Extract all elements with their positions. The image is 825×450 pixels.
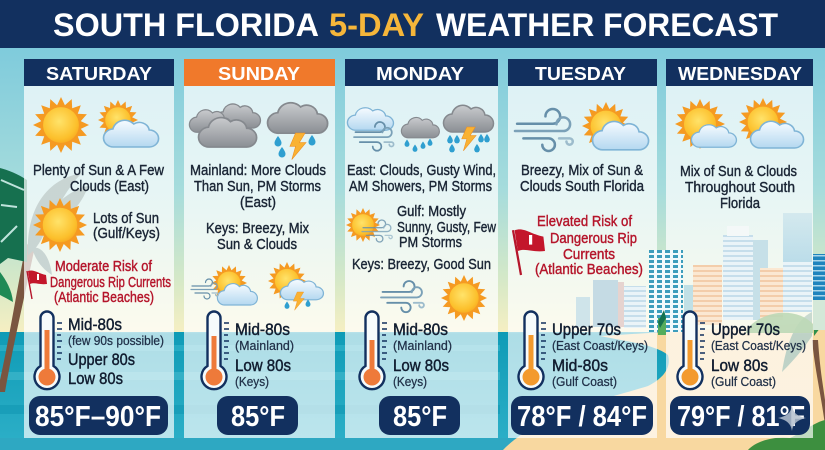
Tuesday temperature notes: (East Coast/Keys) (552, 338, 648, 353)
Saturday east forecast (33, 162, 164, 195)
Monday gulf forecast (397, 203, 496, 251)
Monday keys forecast: Keys: Breezy, Good Sun (352, 256, 491, 273)
icon: thermometer (360, 312, 387, 389)
Wednesday forecast (680, 163, 797, 212)
Wednesday temperature pill: 79°F / 81°F (677, 401, 805, 433)
icon: storm cloud with rain (443, 105, 494, 152)
Monday temperature notes: (Mainland) (393, 338, 452, 353)
Tuesday rip current warning (535, 214, 643, 278)
Monday header: MONDAY (376, 63, 465, 84)
Tuesday rip current warning: Dangerous Rip (550, 231, 637, 247)
Saturday header: SATURDAY (46, 63, 153, 84)
icon: sun, cloud and storm (268, 262, 323, 310)
panel: Wednesday (666, 59, 813, 438)
Tuesday forecast: Breezy, Mix of Sun & (521, 162, 643, 179)
Sunday temperature pill (217, 396, 298, 435)
Monday gulf forecast: Gulf: Mostly (397, 203, 466, 220)
Wednesday panel backing (666, 59, 813, 438)
Saturday temperature pill: 85°F–90°F (35, 401, 161, 433)
icon: thermometer (678, 312, 705, 389)
Monday temperature pill (379, 396, 460, 435)
panel: Monday (345, 59, 498, 438)
icon: sun (441, 275, 487, 321)
Saturday gulf forecast: Lots of Sun (93, 210, 159, 227)
icon: wind, sun and cloud (191, 265, 257, 305)
Monday gulf forecast: PM Storms (399, 234, 462, 251)
panel: Sunday (184, 59, 335, 438)
icon: sun behind cloud (739, 98, 804, 148)
Sunday temperature notes: Low 80s (235, 357, 291, 375)
icon: cloud with wind (347, 108, 394, 151)
Tuesday header (508, 59, 657, 86)
Sunday mainland forecast: (East) (240, 194, 276, 211)
Sunday keys forecast: Sun & Clouds (217, 236, 297, 253)
icon: rip current flag (27, 270, 47, 299)
Tuesday panel backing (508, 59, 657, 438)
Wednesday temperature notes (711, 321, 806, 389)
Saturday temperature notes: Upper 80s (68, 351, 135, 369)
Monday temperature notes (393, 321, 452, 389)
Wednesday header (666, 59, 813, 86)
icon: sparkle watermark (778, 405, 806, 431)
Sunday keys forecast: Keys: Breezy, Mix (206, 220, 309, 237)
Monday header (345, 59, 498, 86)
Saturday temperature notes (68, 316, 164, 388)
Saturday temperature notes: (few 90s possible) (68, 333, 164, 348)
icon: sun gulf (33, 198, 87, 252)
icon: sun behind cloud (582, 102, 649, 150)
background: sky (0, 48, 825, 333)
Tuesday rip current warning: Elevated Risk of (537, 214, 633, 230)
Sunday mainland forecast: Mainland: More Clouds (190, 162, 326, 179)
Tuesday temperature notes: Mid-80s (552, 357, 608, 375)
Saturday header (24, 59, 174, 86)
Saturday east forecast: Plenty of Sun & A Few (33, 162, 164, 179)
Tuesday temperature notes: (Gulf Coast) (552, 374, 617, 389)
Wednesday forecast: Mix of Sun & Clouds (680, 163, 797, 180)
Wednesday temperature notes: (Gulf Coast) (711, 374, 776, 389)
icon: sun with wind (346, 208, 392, 242)
Monday temperature notes: Mid-80s (393, 321, 448, 339)
Sunday header: SUNDAY (218, 63, 301, 84)
icon: thermometer (202, 312, 229, 389)
Tuesday temperature notes (552, 321, 648, 389)
icon: storm cloud (268, 103, 328, 160)
title banner (0, 0, 825, 48)
Tuesday header: TUESDAY (535, 63, 627, 84)
Wednesday forecast: Throughout South (685, 179, 795, 196)
Sunday mainland forecast (190, 162, 326, 211)
title: 5-Day: 5-DAY (329, 7, 424, 43)
icon: heavy clouds (189, 104, 260, 147)
icon: rip current flag (513, 229, 545, 275)
Sunday keys forecast (206, 220, 309, 253)
Sunday temperature notes: (Keys) (235, 374, 269, 389)
Wednesday temperature notes: (East Coast/Keys) (711, 338, 806, 353)
Sunday temperature notes (235, 321, 294, 389)
background: sea (0, 332, 825, 450)
Tuesday forecast (520, 162, 645, 195)
Monday east forecast: East: Clouds, Gusty Wind, (347, 162, 496, 179)
icon: thermometer (34, 312, 62, 389)
Saturday rip current warning: Moderate Risk of (55, 259, 153, 275)
Monday east forecast: AM Showers, PM Storms (349, 178, 492, 195)
icon: sun behind cloud (98, 100, 159, 147)
Saturday temperature notes: Low 80s (68, 370, 123, 388)
Tuesday rip current warning: (Atlantic Beaches) (535, 262, 643, 278)
panel: Tuesday (508, 59, 657, 438)
background: city skyline (576, 213, 825, 335)
Saturday east forecast: Clouds (East) (70, 178, 149, 195)
Tuesday rip current warning: Currents (563, 247, 615, 263)
Tuesday forecast: Clouds South Florida (520, 178, 645, 195)
Tuesday temperature notes: Upper 70s (552, 321, 621, 339)
Saturday gulf forecast: (Gulf/Keys) (93, 225, 160, 242)
icon: sun behind cloud (675, 99, 736, 149)
icon: wind (381, 281, 424, 312)
Sunday temperature notes: (Mainland) (235, 338, 294, 353)
icon: shower cloud (401, 117, 439, 152)
Sunday header (184, 59, 335, 86)
Tuesday temperature pill: 78°F / 84°F (517, 401, 647, 433)
background: left palm tree (0, 168, 88, 392)
Monday east forecast (347, 162, 496, 195)
Wednesday header: WEDNESDAY (678, 63, 803, 84)
panel: Saturday (24, 59, 174, 438)
Wednesday temperature notes: Upper 70s (711, 321, 780, 339)
Saturday rip current warning: (Atlantic Beaches) (54, 290, 154, 306)
Monday temperature pill: 85°F (393, 401, 447, 433)
Wednesday temperature notes: Low 80s (711, 357, 768, 375)
title: South Florida: SOUTH FLORIDA (53, 7, 319, 43)
Monday temperature notes: (Keys) (393, 374, 427, 389)
Sunday temperature notes: Mid-80s (235, 321, 290, 339)
icon: sun (33, 97, 89, 153)
Sunday temperature pill: 85°F (231, 401, 285, 433)
Monday gulf forecast: Sunny, Gusty, Few (397, 219, 496, 236)
background: right palm and bush (748, 296, 825, 450)
Sunday mainland forecast: Than Sun, PM Storms (194, 178, 321, 195)
icon: wind (515, 109, 573, 151)
Monday temperature notes: Low 80s (393, 357, 449, 375)
Saturday gulf forecast (93, 210, 160, 242)
Saturday temperature notes: Mid-80s (68, 316, 122, 334)
Saturday rip current warning (50, 259, 171, 306)
icon: thermometer (518, 312, 546, 389)
title: Weather Forecast: WEATHER FORECAST (436, 7, 778, 43)
Wednesday forecast: Florida (720, 195, 761, 212)
Saturday rip current warning: Dangerous Rip Currents (50, 275, 171, 291)
background: beach sand (503, 322, 825, 450)
